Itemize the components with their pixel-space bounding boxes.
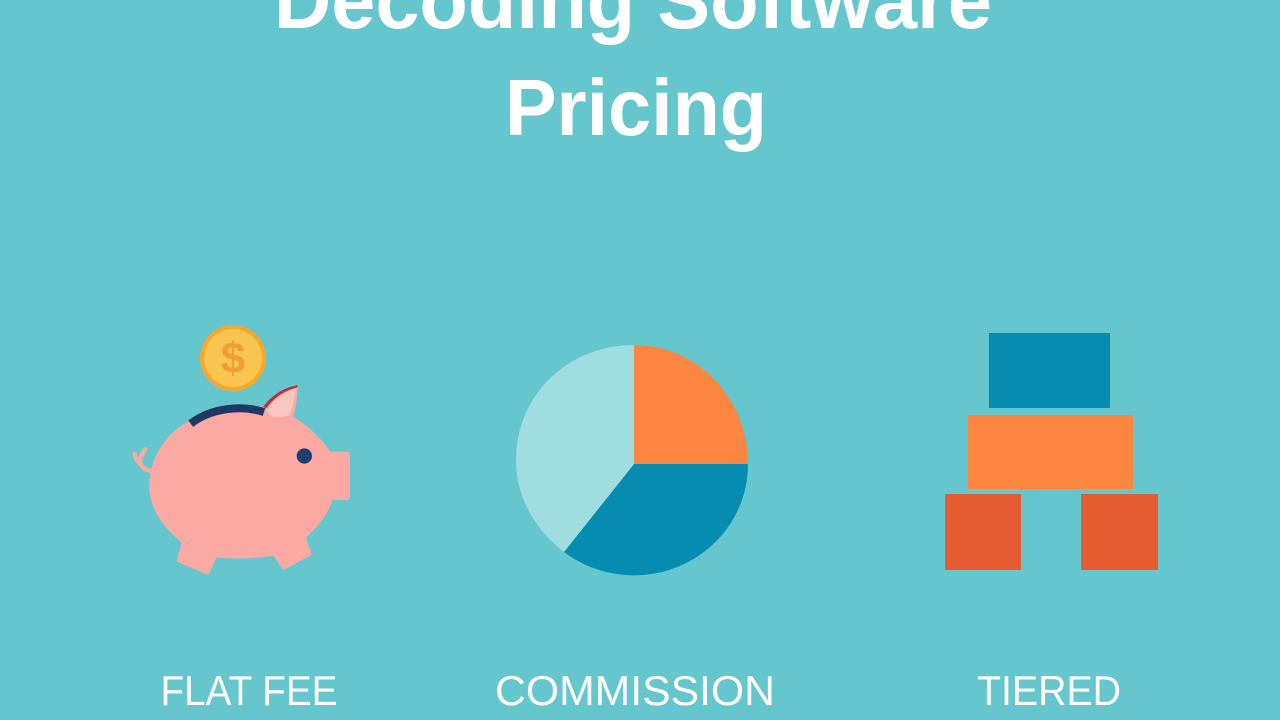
pig eye	[297, 448, 312, 464]
label: tiered: TIERED	[977, 667, 1121, 714]
icon: tiered blocks	[945, 333, 1158, 570]
pig body	[149, 385, 350, 575]
label: commission: COMMISSION	[495, 667, 775, 714]
title: Pricing	[505, 63, 767, 152]
label: flat fee: FLAT FEE	[160, 667, 338, 714]
coin	[200, 325, 266, 391]
coin: $	[221, 334, 245, 383]
coin slot	[191, 408, 264, 424]
pig	[135, 385, 350, 575]
pig ear	[267, 388, 296, 417]
title	[274, 0, 992, 152]
pie chart	[516, 345, 748, 575]
pig tail	[135, 449, 151, 471]
icon: piggy bank with coin	[135, 325, 350, 575]
